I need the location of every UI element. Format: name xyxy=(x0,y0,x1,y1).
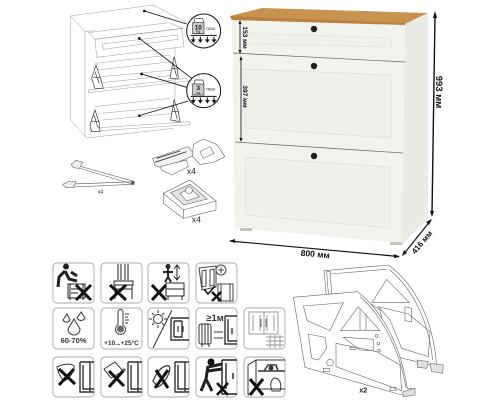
worktop edge xyxy=(230,16,405,25)
weight badge 3 kg xyxy=(187,74,221,108)
icon: no abrasive sponge xyxy=(153,362,189,392)
icon: no spray xyxy=(104,362,142,392)
icon: assembly warning xyxy=(199,265,233,301)
icon: temperature xyxy=(104,310,139,347)
dimension: 153 xyxy=(238,20,248,54)
weight badge 3 kg: kg xyxy=(196,91,200,95)
drawer panel xyxy=(243,33,392,47)
panel: cabinet photo xyxy=(230,8,428,245)
rear bracket xyxy=(324,265,443,373)
parts: fittings xyxy=(63,139,225,225)
icon: do not stand xyxy=(152,264,184,300)
stay arms: x4 xyxy=(98,190,103,196)
worktop xyxy=(230,8,428,24)
dimension: depth xyxy=(402,219,434,256)
cabinet front xyxy=(232,20,405,243)
dimension: width xyxy=(229,239,400,260)
weight badge 3 kg: max xyxy=(206,87,216,92)
icon: ventilated cabinet xyxy=(249,312,284,348)
weight badge 10 kg: 10 xyxy=(195,24,202,31)
damper block: x4 xyxy=(192,215,201,225)
cabinet carcass xyxy=(71,5,187,138)
feet xyxy=(240,228,402,245)
quantity label: x2 xyxy=(359,385,367,394)
stay arms xyxy=(63,160,135,196)
cabinet side xyxy=(402,14,428,245)
dimension: 397: 397 мм xyxy=(241,85,248,108)
icon: keep 1 m from heater: ≥1м xyxy=(206,313,224,324)
icon: do not push xyxy=(201,358,237,395)
weight badge 10 kg: max xyxy=(206,26,216,31)
icon: no wet cloth xyxy=(57,362,94,392)
panel: care icons xyxy=(53,263,285,397)
icon: do not sit xyxy=(58,264,91,300)
door seams xyxy=(233,53,405,153)
knobs xyxy=(311,26,317,159)
icon: keep 1 m from heater xyxy=(199,313,237,347)
exploded lift mechanism drawing xyxy=(293,265,443,397)
weight badge 3 kg: 3 xyxy=(197,85,201,92)
damper block xyxy=(163,180,216,225)
flap two xyxy=(90,98,190,131)
dimensions xyxy=(229,11,444,260)
weight badge 10 kg xyxy=(187,14,221,48)
icon: temperature: +10...+25°C xyxy=(104,339,139,347)
leader lines xyxy=(139,11,192,116)
drawer xyxy=(88,23,184,57)
door panel upper xyxy=(243,69,391,138)
leader dots xyxy=(138,10,146,117)
front bracket xyxy=(293,292,415,397)
dimension: 397 xyxy=(240,56,248,142)
dimension: depth: 416 мм xyxy=(410,229,434,256)
weight badge 10 kg: kg xyxy=(196,30,200,34)
hinge plate xyxy=(153,139,225,176)
icon: humidity 60-70% xyxy=(61,312,87,345)
icon: do not hang load xyxy=(110,264,133,300)
icon: no heavy items inside xyxy=(248,360,285,395)
line drawing: open cabinet xyxy=(71,5,221,138)
icon: no direct sun xyxy=(149,310,189,348)
flap one xyxy=(88,55,188,93)
dimension: 153: 153 мм xyxy=(241,26,248,49)
tile frames xyxy=(53,263,285,397)
hinge plate: x4 xyxy=(187,166,196,176)
door panel lower xyxy=(245,157,390,228)
dimension: height: 993 мм xyxy=(433,76,444,108)
dimension: width: 800 мм xyxy=(300,248,330,260)
dimension: height xyxy=(430,11,444,217)
icon: humidity 60-70%: 60-70% xyxy=(61,336,87,345)
lift mechanisms xyxy=(90,57,180,132)
